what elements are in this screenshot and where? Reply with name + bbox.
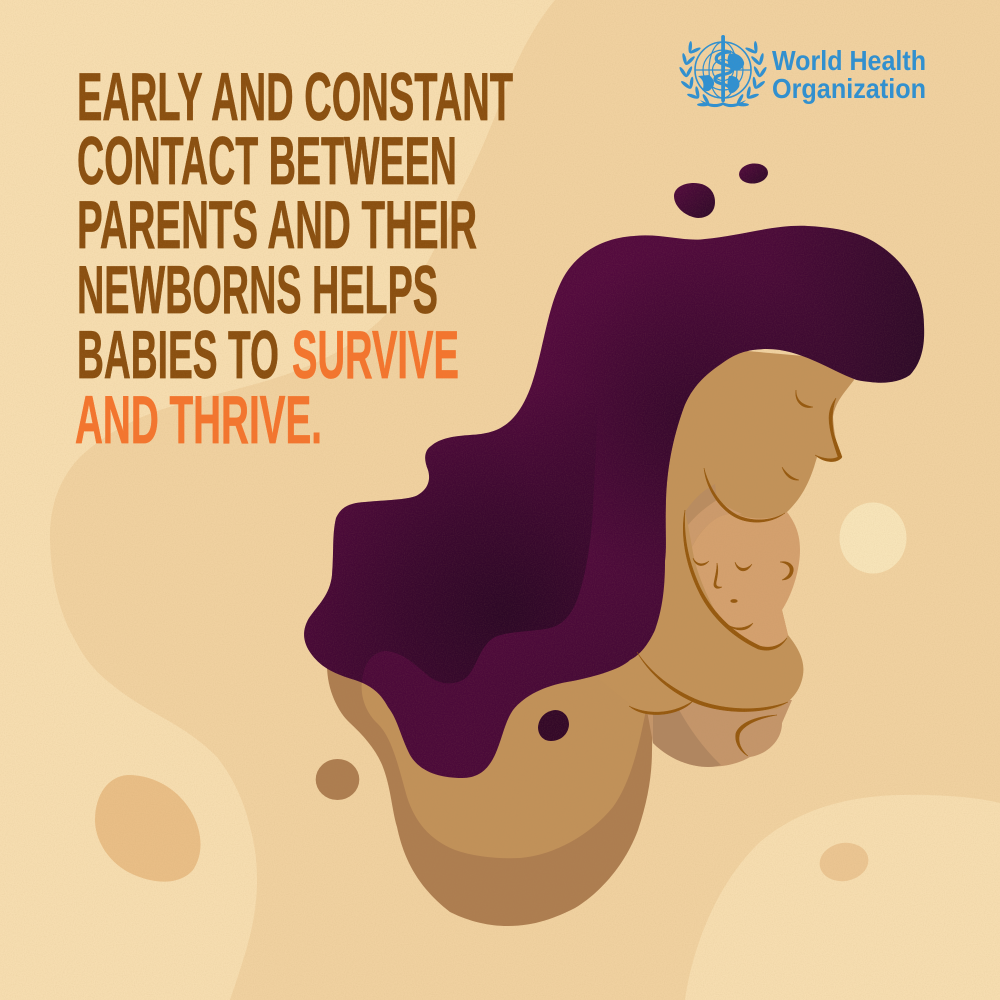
background spot: bottom-right [817,839,871,885]
headline: BABIES TO [77,317,279,393]
headline [75,59,513,458]
neck shadow band [685,484,717,525]
small brown spot [316,759,359,800]
headline: AND THRIVE. [75,382,322,458]
lower body dark layer [327,665,653,926]
neck light band [688,500,742,547]
dark spot on body [538,710,569,741]
logo wordmark [772,45,926,104]
floating hair drop: small [738,162,769,185]
lower body light layer [362,650,650,858]
floating hair drop: medium [674,183,715,218]
background: bottom-right light blob [685,795,1000,1000]
logo wordmark: World Health [772,45,926,76]
logo emblem [678,35,768,107]
baby nostril [730,599,738,603]
line art: face and arms [629,390,842,756]
headline: NEWBORNS HELPS [77,252,438,328]
background spot: light circle [840,502,906,574]
chest under the arm [645,700,792,767]
WHO logo [678,35,926,107]
headline: SURVIVE [292,317,459,393]
headline: PARENTS AND THEIR [77,187,477,263]
mother skin: face, neck and arm [600,340,854,714]
logo wordmark: Organization [772,73,926,104]
figure: mother and baby [290,215,940,926]
headline: EARLY AND CONSTANT [77,59,513,135]
baby head [692,512,800,648]
background spot: bottom-left [95,775,200,882]
headline: CONTACT BETWEEN [77,123,457,199]
hair dark inner shadow [304,412,594,684]
hair [290,215,940,790]
chest shadow [653,708,721,767]
